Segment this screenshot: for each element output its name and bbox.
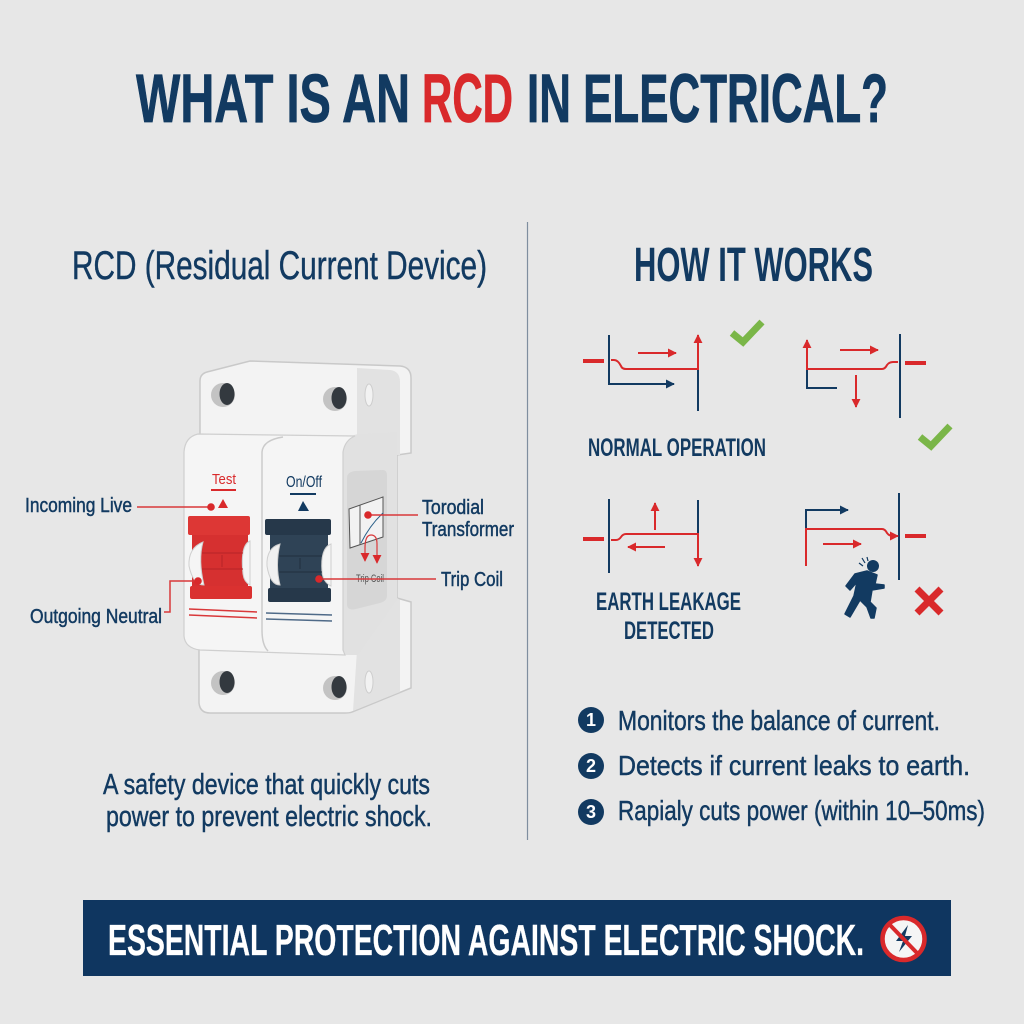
label: earth leakage detected: DETECTED bbox=[624, 617, 714, 645]
label: normal operation: NORMAL OPERATION bbox=[588, 434, 766, 462]
on/off label bbox=[286, 474, 322, 511]
step 1: 1 bbox=[586, 710, 596, 730]
label: earth leakage detected: EARTH LEAKAGE bbox=[596, 588, 741, 616]
title bbox=[136, 60, 888, 137]
icon: green check 2 bbox=[920, 426, 950, 446]
test label bbox=[211, 471, 237, 508]
diagram: normal operation left bbox=[583, 335, 698, 411]
device side panel bbox=[342, 432, 397, 655]
heading: How it works: HOW IT WORKS bbox=[634, 239, 873, 292]
divider bbox=[526, 222, 528, 840]
title: RCD bbox=[422, 60, 513, 137]
test label: Test bbox=[212, 471, 237, 488]
description text bbox=[103, 769, 432, 833]
RCD device illustration bbox=[184, 361, 411, 713]
front module bbox=[184, 434, 355, 655]
callout: Toroidal Transformer: Torodial bbox=[422, 497, 484, 519]
side label and schematic: Trip Coil bbox=[356, 573, 384, 585]
on/off label: On/Off bbox=[286, 474, 322, 491]
label: earth leakage detected bbox=[596, 588, 741, 645]
icon: green check 1 bbox=[732, 322, 762, 342]
callout: Incoming Live bbox=[25, 495, 215, 517]
callout: Trip Coil: Trip Coil bbox=[441, 569, 503, 591]
diagram: earth leakage left bbox=[583, 499, 698, 573]
icon: shocked person bbox=[845, 557, 884, 618]
dark toggle switch bbox=[265, 519, 331, 602]
callout: Toroidal Transformer bbox=[364, 497, 514, 541]
callout: Outgoing Neutral: Outgoing Neutral bbox=[30, 606, 162, 628]
icon: red cross bbox=[917, 589, 941, 613]
steps list bbox=[578, 705, 985, 826]
callout: Incoming Live: Incoming Live bbox=[25, 495, 132, 517]
device rear body bbox=[199, 361, 411, 713]
heading: RCD (Residual Current Device): RCD (Residual Current Device) bbox=[72, 244, 487, 288]
description text: A safety device that quickly cuts bbox=[103, 769, 430, 801]
step 2: 2 bbox=[586, 756, 596, 776]
icon: no electricity bbox=[882, 918, 924, 960]
step 1: Monitors the balance of current. bbox=[618, 705, 940, 736]
indicator stripes bbox=[189, 609, 332, 621]
diagram: earth leakage right bbox=[806, 493, 926, 580]
description text: power to prevent electric shock. bbox=[106, 801, 432, 833]
callout: Trip Coil bbox=[315, 569, 503, 591]
title: WHAT IS AN bbox=[136, 60, 410, 137]
diagram: normal operation right bbox=[807, 334, 926, 418]
side label and schematic bbox=[347, 470, 387, 609]
device side shading bbox=[353, 368, 400, 711]
step 2: Detects if current leaks to earth. bbox=[618, 750, 970, 781]
red toggle switch bbox=[188, 516, 252, 599]
module divider bbox=[262, 437, 283, 651]
step 3: 3 bbox=[586, 802, 596, 822]
callout: Outgoing Neutral bbox=[30, 577, 202, 628]
callout: Toroidal Transformer: Transformer bbox=[422, 519, 514, 541]
bottom banner bbox=[83, 900, 951, 976]
mounting holes bbox=[211, 383, 373, 700]
